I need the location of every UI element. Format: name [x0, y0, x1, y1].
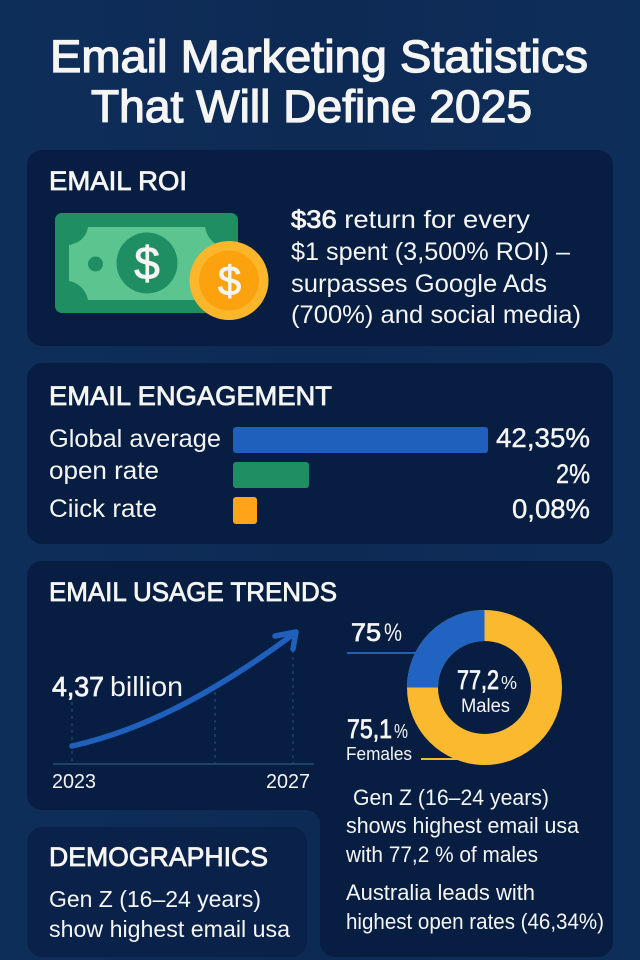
panel: email engagement	[27, 363, 613, 544]
value: 2%: 2%	[556, 459, 590, 489]
title: Email Marketing Statistics	[50, 31, 588, 82]
line chart: email users 2023 to 2027: 2027	[266, 771, 310, 793]
text: Gen Z usage	[345, 785, 579, 867]
text: Gen Z usage: shows highest email usa	[346, 813, 579, 838]
donut chart: gender usage: %	[384, 619, 402, 647]
donut chart: gender usage: %	[501, 673, 517, 693]
heading: email usage trends: EMAIL USAGE TRENDS	[49, 577, 337, 607]
panel: demographics	[27, 827, 307, 957]
value: 0,08%: 0,08%	[512, 494, 590, 524]
line chart: email users 2023 to 2027: 2023	[52, 771, 96, 793]
panel: email ROI	[27, 150, 613, 346]
donut chart: gender usage: %	[394, 721, 408, 743]
heading: email ROI: EMAIL ROI	[49, 166, 187, 196]
heading: demographics: DEMOGRAPHICS	[49, 842, 268, 872]
label: global average open rate: Global average	[49, 425, 221, 453]
bar: open rate	[233, 427, 488, 453]
label: global average open rate: open rate	[49, 457, 159, 485]
donut chart: gender usage: 77,2	[457, 665, 499, 695]
title: That Will Define 2025	[91, 81, 532, 132]
panel: email usage trends	[27, 561, 613, 957]
donut chart: gender usage: 75,1	[347, 714, 392, 744]
donut chart: gender usage	[346, 619, 546, 764]
ROI description: $1 spent (3,500% ROI) –	[291, 238, 570, 266]
donut chart: gender usage: Males	[461, 696, 510, 717]
line chart: email users 2023 to 2027: 4,37	[52, 671, 104, 702]
text: Gen Z demographics: show highest email usa	[49, 916, 290, 942]
label: click rate: Ciick rate	[49, 495, 157, 523]
text: Gen Z demographics	[49, 886, 290, 942]
value: 42,35%: 42,35%	[496, 423, 590, 453]
line chart: email users 2023 to 2027: billion	[110, 671, 183, 702]
ROI description: (700%) and social media)	[291, 301, 581, 329]
text: Gen Z demographics: Gen Z (16–24 years)	[49, 886, 261, 912]
ROI description: surpasses Google Ads	[291, 270, 547, 298]
label: global average open rate	[49, 425, 221, 485]
bar: green	[233, 462, 309, 488]
icon: banknote and coin: $	[134, 237, 160, 289]
text: Australia open rates	[346, 880, 604, 934]
text: Gen Z usage: Gen Z (16–24 years)	[353, 785, 549, 810]
ROI description	[291, 206, 581, 329]
title	[50, 31, 588, 132]
icon: banknote and coin	[55, 213, 268, 320]
text: Australia open rates: highest open rates (46,34%)	[346, 909, 604, 934]
ROI description: $36 return for every	[291, 206, 531, 234]
text: Gen Z usage: with 77,2 % of males	[345, 842, 538, 867]
line chart: email users 2023 to 2027	[52, 632, 314, 793]
bar: click rate	[233, 497, 257, 524]
heading: email engagement: EMAIL ENGAGEMENT	[49, 381, 332, 411]
donut chart: gender usage: Females	[346, 744, 412, 764]
text: Australia open rates: Australia leads with	[346, 880, 535, 905]
icon: banknote and coin: $	[218, 257, 241, 304]
donut chart: gender usage: 75	[351, 619, 381, 647]
